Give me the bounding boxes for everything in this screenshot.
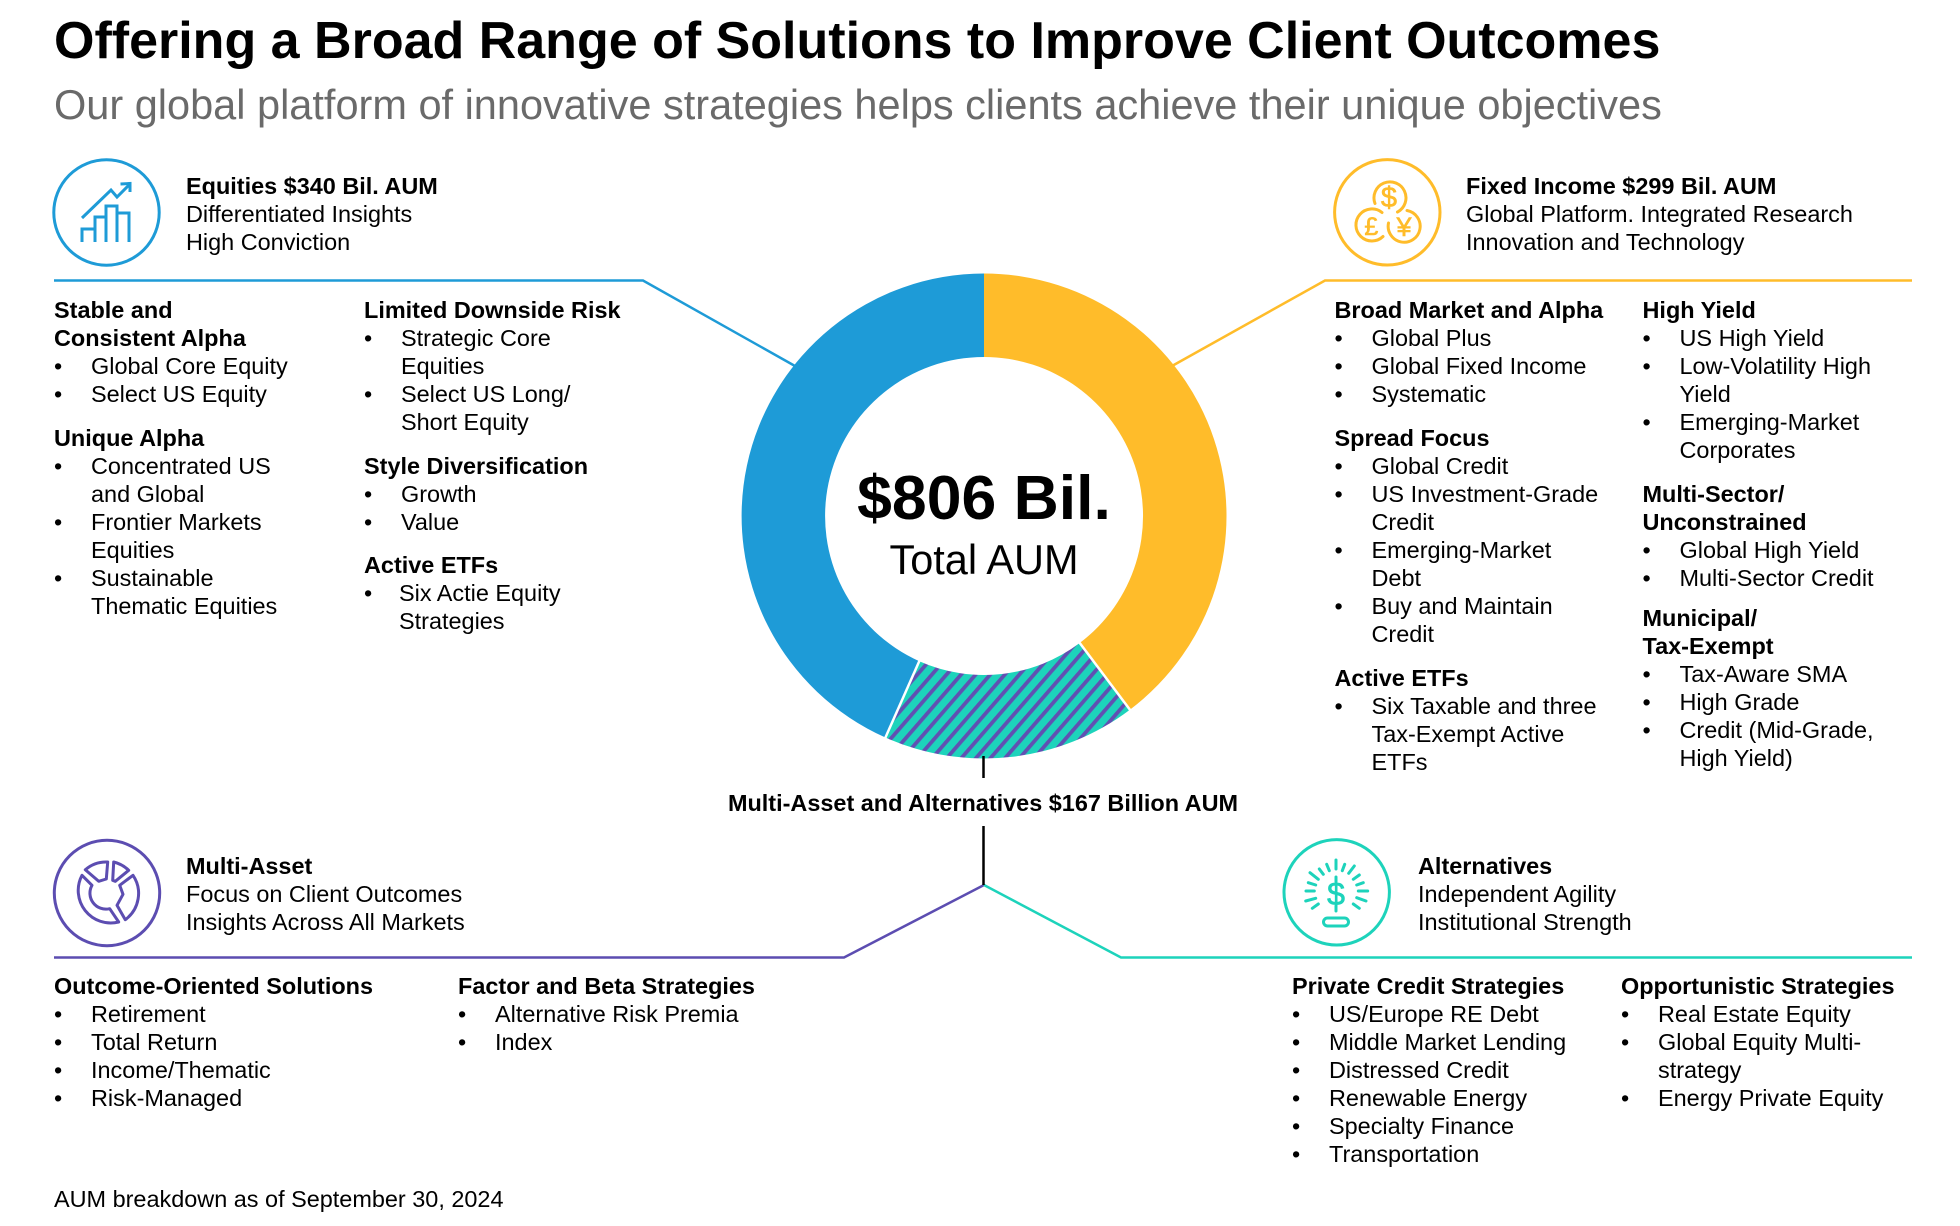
private credit strategies: [1292, 973, 1566, 1167]
style diversification: •: [364, 508, 372, 534]
limited downside risk: Limited Downside Risk: [364, 297, 621, 323]
unique alpha: Thematic Equities: [91, 592, 277, 618]
municipal tax-exempt: •: [1642, 717, 1651, 743]
factor and beta strategies: Index: [495, 1029, 552, 1055]
multi-sector unconstrained: Multi-Sector/: [1642, 481, 1784, 507]
multi-sector unconstrained: •: [1642, 537, 1651, 563]
private credit strategies: Private Credit Strategies: [1292, 973, 1564, 999]
panel: equities strategies: [54, 297, 621, 634]
factor and beta strategies: •: [458, 1029, 466, 1055]
unique alpha: •: [54, 564, 62, 590]
factor and beta strategies: •: [458, 1001, 466, 1027]
multi-sector unconstrained: Unconstrained: [1642, 509, 1807, 535]
stable and consistent alpha: Global Core Equity: [91, 353, 288, 379]
outcome-oriented solutions: •: [54, 1057, 62, 1083]
outcome-oriented solutions: Total Return: [91, 1029, 217, 1055]
opportunistic strategies: Energy Private Equity: [1658, 1085, 1883, 1111]
unique alpha: •: [54, 508, 62, 534]
active ETFs: Active ETFs: [364, 552, 498, 578]
icon: currency coins: £: [1364, 213, 1378, 241]
fixed income header text: Innovation and Technology: [1466, 229, 1744, 255]
footnote: AUM breakdown as of September 30, 2024: [54, 1186, 503, 1212]
outcome-oriented solutions: Risk-Managed: [91, 1085, 242, 1111]
spread focus: Spread Focus: [1334, 425, 1490, 451]
equities header text: High Conviction: [186, 229, 350, 255]
icon: alternatives dollar bulb: [1284, 840, 1389, 945]
leader tick below donut: [982, 756, 985, 778]
equities header text: Equities $340 Bil. AUM: [186, 173, 438, 199]
separator: equities and hatch: [885, 660, 920, 738]
limited downside risk: •: [364, 325, 372, 351]
private credit strategies: Renewable Energy: [1329, 1085, 1527, 1111]
stable and consistent alpha: Consistent Alpha: [54, 325, 246, 351]
private credit strategies: US/Europe RE Debt: [1329, 1001, 1539, 1027]
private credit strategies: Middle Market Lending: [1329, 1029, 1566, 1055]
broad market and alpha: •: [1334, 325, 1343, 351]
separator: fixed income and hatch: [1079, 642, 1130, 710]
style diversification: Value: [401, 508, 459, 534]
multi-asset header text: Insights Across All Markets: [186, 909, 465, 935]
private credit strategies: •: [1292, 1085, 1300, 1111]
unique alpha: •: [54, 452, 62, 478]
unique alpha: Frontier Markets: [91, 508, 262, 534]
multi-asset header text: Focus on Client Outcomes: [186, 881, 462, 907]
style diversification: Style Diversification: [364, 452, 588, 478]
limited downside risk: Short Equity: [401, 409, 529, 435]
connector: equities: [54, 280, 795, 366]
multi-asset header text: Multi-Asset: [186, 853, 312, 879]
spread focus: Global Credit: [1372, 453, 1508, 479]
unique alpha: Unique Alpha: [54, 424, 204, 450]
icon: currency coins: $: [1381, 182, 1397, 214]
private credit strategies: Distressed Credit: [1329, 1057, 1509, 1083]
outcome-oriented solutions: Outcome-Oriented Solutions: [54, 973, 373, 999]
connector: multi-asset: [54, 885, 984, 958]
spread focus: •: [1334, 593, 1343, 619]
active ETFs: •: [1334, 693, 1343, 719]
alternatives header text: Institutional Strength: [1418, 909, 1632, 935]
alternatives header text: Independent Agility: [1418, 881, 1616, 907]
municipal tax-exempt: •: [1642, 661, 1651, 687]
limited downside risk: •: [364, 381, 372, 407]
high yield: Yield: [1680, 381, 1731, 407]
high yield: US High Yield: [1680, 325, 1824, 351]
segment: equities: [742, 274, 984, 738]
subtitle: Our global platform of innovative strategies helps clients achieve their unique objectives: [54, 81, 1662, 128]
stable and consistent alpha: [54, 297, 288, 407]
spread focus: Credit: [1372, 621, 1434, 647]
outcome-oriented solutions: •: [54, 1001, 62, 1027]
active ETFs: [364, 552, 561, 634]
fixed income header text: [1466, 173, 1853, 255]
broad market and alpha: [1334, 297, 1604, 407]
private credit strategies: •: [1292, 1057, 1300, 1083]
multi-asset header text: [186, 853, 465, 935]
spread focus: [1334, 425, 1598, 647]
factor and beta strategies: [458, 973, 755, 1055]
donut segment label: Multi-Asset and Alternatives $167 Billion AUM: [728, 790, 1238, 816]
stable and consistent alpha: Select US Equity: [91, 381, 267, 407]
high yield: •: [1642, 325, 1651, 351]
spread focus: Buy and Maintain: [1372, 593, 1553, 619]
private credit strategies: Transportation: [1329, 1141, 1479, 1167]
unique alpha: and Global: [91, 480, 204, 506]
donut center total: [857, 463, 1111, 583]
outcome-oriented solutions: Retirement: [91, 1001, 206, 1027]
opportunistic strategies: strategy: [1658, 1057, 1741, 1083]
high yield: Emerging-Market: [1680, 409, 1859, 435]
broad market and alpha: •: [1334, 381, 1343, 407]
high yield: Low-Volatility High: [1680, 353, 1871, 379]
unique alpha: Sustainable: [91, 564, 214, 590]
municipal tax-exempt: •: [1642, 689, 1651, 715]
opportunistic strategies: [1621, 973, 1894, 1111]
high yield: •: [1642, 353, 1651, 379]
municipal tax-exempt: Credit (Mid-Grade,: [1680, 717, 1874, 743]
high yield: High Yield: [1642, 297, 1756, 323]
fixed income header text: Global Platform. Integrated Research: [1466, 201, 1853, 227]
alternatives header text: Alternatives: [1418, 853, 1552, 879]
limited downside risk: Select US Long/: [401, 381, 570, 407]
spread focus: Credit: [1372, 509, 1434, 535]
icon: alternatives dollar bulb: $: [1327, 876, 1345, 912]
icon: currency coins: ¥: [1395, 212, 1412, 242]
municipal tax-exempt: [1642, 605, 1874, 771]
icon: currency coins: [1335, 160, 1440, 265]
alternatives header text: [1418, 853, 1632, 935]
stable and consistent alpha: •: [54, 353, 62, 379]
fixed income header text: Fixed Income $299 Bil. AUM: [1466, 173, 1776, 199]
broad market and alpha: Global Fixed Income: [1372, 353, 1586, 379]
panel: alternatives strategies: [1292, 973, 1894, 1167]
high yield: [1642, 297, 1871, 463]
multi-sector unconstrained: •: [1642, 565, 1651, 591]
municipal tax-exempt: High Grade: [1680, 689, 1799, 715]
panel: multi-asset strategies: [54, 973, 755, 1111]
segment: multi-asset and alternatives: [885, 643, 1130, 758]
spread focus: Emerging-Market: [1372, 537, 1551, 563]
active ETFs: Six Actie Equity: [399, 580, 561, 606]
icon: equities chart: [54, 160, 159, 265]
icon: multi-asset pie: [54, 840, 160, 946]
leader line to branches: [982, 826, 985, 885]
high yield: •: [1642, 409, 1651, 435]
outcome-oriented solutions: •: [54, 1085, 62, 1111]
multi-sector unconstrained: Global High Yield: [1680, 537, 1859, 563]
factor and beta strategies: Factor and Beta Strategies: [458, 973, 755, 999]
high yield: Corporates: [1680, 437, 1795, 463]
private credit strategies: •: [1292, 1001, 1300, 1027]
active ETFs: Strategies: [399, 608, 505, 634]
unique alpha: Concentrated US: [91, 452, 271, 478]
connector: fixed income: [1172, 280, 1912, 366]
municipal tax-exempt: Municipal/: [1642, 605, 1757, 631]
active ETFs: Six Taxable and three: [1372, 693, 1596, 719]
opportunistic strategies: •: [1621, 1029, 1629, 1055]
total value: $806 Bil.: [857, 463, 1111, 533]
private credit strategies: Specialty Finance: [1329, 1113, 1514, 1139]
broad market and alpha: Global Plus: [1372, 325, 1491, 351]
active ETFs: •: [364, 580, 372, 606]
broad market and alpha: Broad Market and Alpha: [1334, 297, 1603, 323]
equities header text: [186, 173, 438, 255]
multi-sector unconstrained: [1642, 481, 1874, 591]
opportunistic strategies: Opportunistic Strategies: [1621, 973, 1894, 999]
private credit strategies: •: [1292, 1141, 1300, 1167]
spread focus: Debt: [1372, 565, 1421, 591]
opportunistic strategies: •: [1621, 1001, 1629, 1027]
private credit strategies: •: [1292, 1029, 1300, 1055]
spread focus: •: [1334, 537, 1343, 563]
multi-sector unconstrained: Multi-Sector Credit: [1680, 565, 1874, 591]
style diversification: [364, 452, 588, 534]
limited downside risk: Strategic Core: [401, 325, 551, 351]
broad market and alpha: Systematic: [1372, 381, 1486, 407]
active ETFs: Active ETFs: [1334, 665, 1469, 691]
active ETFs: Tax-Exempt Active: [1372, 721, 1564, 747]
spread focus: US Investment-Grade: [1372, 481, 1598, 507]
total label: Total AUM: [889, 536, 1079, 583]
outcome-oriented solutions: •: [54, 1029, 62, 1055]
style diversification: •: [364, 480, 372, 506]
equities header text: Differentiated Insights: [186, 201, 412, 227]
stable and consistent alpha: Stable and: [54, 297, 173, 323]
panel: fixed income strategies: [1334, 297, 1874, 775]
active ETFs: [1334, 665, 1596, 775]
title: Offering a Broad Range of Solutions to Improve Client Outcomes: [54, 12, 1660, 70]
limited downside risk: [364, 297, 621, 435]
donut chart: [742, 274, 1227, 758]
municipal tax-exempt: Tax-Aware SMA: [1680, 661, 1847, 687]
spread focus: •: [1334, 481, 1343, 507]
unique alpha: Equities: [91, 536, 174, 562]
opportunistic strategies: Real Estate Equity: [1658, 1001, 1851, 1027]
factor and beta strategies: Alternative Risk Premia: [495, 1001, 739, 1027]
connector: alternatives: [984, 885, 1912, 958]
outcome-oriented solutions: Income/Thematic: [91, 1057, 271, 1083]
outcome-oriented solutions: [54, 973, 373, 1111]
limited downside risk: Equities: [401, 353, 484, 379]
private credit strategies: •: [1292, 1113, 1300, 1139]
opportunistic strategies: Global Equity Multi-: [1658, 1029, 1861, 1055]
active ETFs: ETFs: [1372, 749, 1428, 775]
opportunistic strategies: •: [1621, 1085, 1629, 1111]
municipal tax-exempt: High Yield): [1680, 745, 1793, 771]
segment: fixed income: [984, 274, 1227, 710]
broad market and alpha: •: [1334, 353, 1343, 379]
stable and consistent alpha: •: [54, 381, 62, 407]
spread focus: •: [1334, 453, 1343, 479]
municipal tax-exempt: Tax-Exempt: [1642, 633, 1774, 659]
unique alpha: [54, 424, 277, 619]
style diversification: Growth: [401, 480, 477, 506]
